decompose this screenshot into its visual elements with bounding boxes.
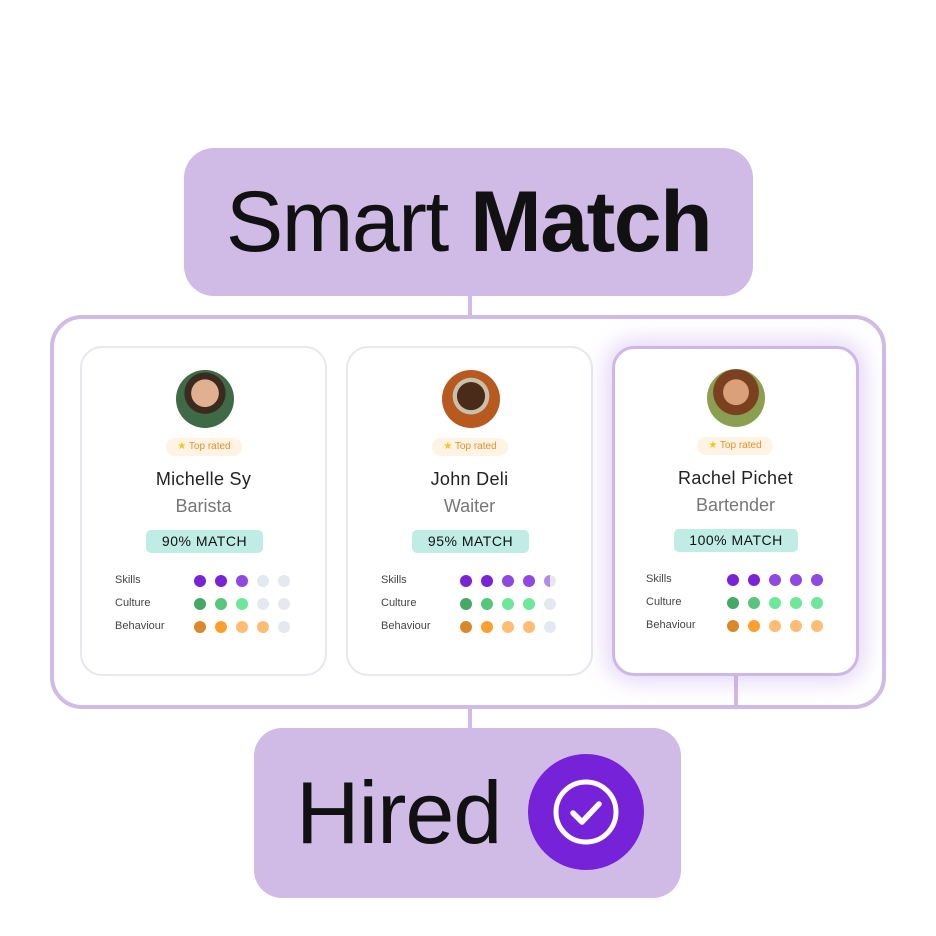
match badge: [674, 529, 798, 552]
role: Barista: [175, 496, 232, 516]
card: Rachel Pichet (selected): [612, 346, 859, 676]
name: Rachel Pichet: [678, 468, 793, 488]
role: Waiter: [444, 496, 495, 516]
name: Michelle Sy: [156, 469, 251, 489]
ratings: Skills: [381, 574, 407, 586]
name: John Deli: [431, 469, 508, 489]
icon: check circle: [528, 754, 644, 870]
ratings: Behaviour: [381, 620, 431, 632]
connector lines: [468, 294, 472, 318]
avatar: [707, 369, 765, 427]
panel: candidates: [50, 315, 886, 709]
ratings: Skills: [646, 573, 672, 585]
match badge: 90% MATCH: [162, 533, 247, 549]
ratings: [646, 573, 823, 632]
ratings: [115, 574, 290, 633]
match badge: 95% MATCH: [428, 533, 513, 549]
role: Bartender: [696, 495, 775, 515]
ratings: Culture: [115, 597, 150, 609]
badge: top rated: [166, 438, 242, 456]
title: SmartMatch: Smart Match: [226, 174, 711, 270]
ratings: Skills: [115, 574, 141, 586]
hired text: Hired: [296, 763, 501, 862]
badge: top rated: ★ Top rated: [443, 441, 497, 452]
match badge: [146, 530, 263, 553]
match badge: 100% MATCH: [689, 532, 783, 548]
badge: top rated: ★ Top rated: [177, 441, 231, 452]
avatar: [442, 370, 500, 428]
ratings: Culture: [381, 597, 416, 609]
ratings: Behaviour: [115, 620, 165, 632]
ratings: Culture: [646, 596, 681, 608]
avatar: [176, 370, 234, 428]
ratings: Behaviour: [646, 619, 696, 631]
card: Michelle Sy: [80, 346, 327, 676]
title: SmartMatch: [184, 148, 753, 296]
badge: top rated: [697, 437, 773, 455]
match badge: [412, 530, 529, 553]
badge: top rated: ★ Top rated: [708, 440, 762, 451]
hired box: [254, 728, 681, 898]
badge: top rated: [432, 438, 508, 456]
ratings: [381, 574, 556, 633]
card: John Deli: [346, 346, 593, 676]
